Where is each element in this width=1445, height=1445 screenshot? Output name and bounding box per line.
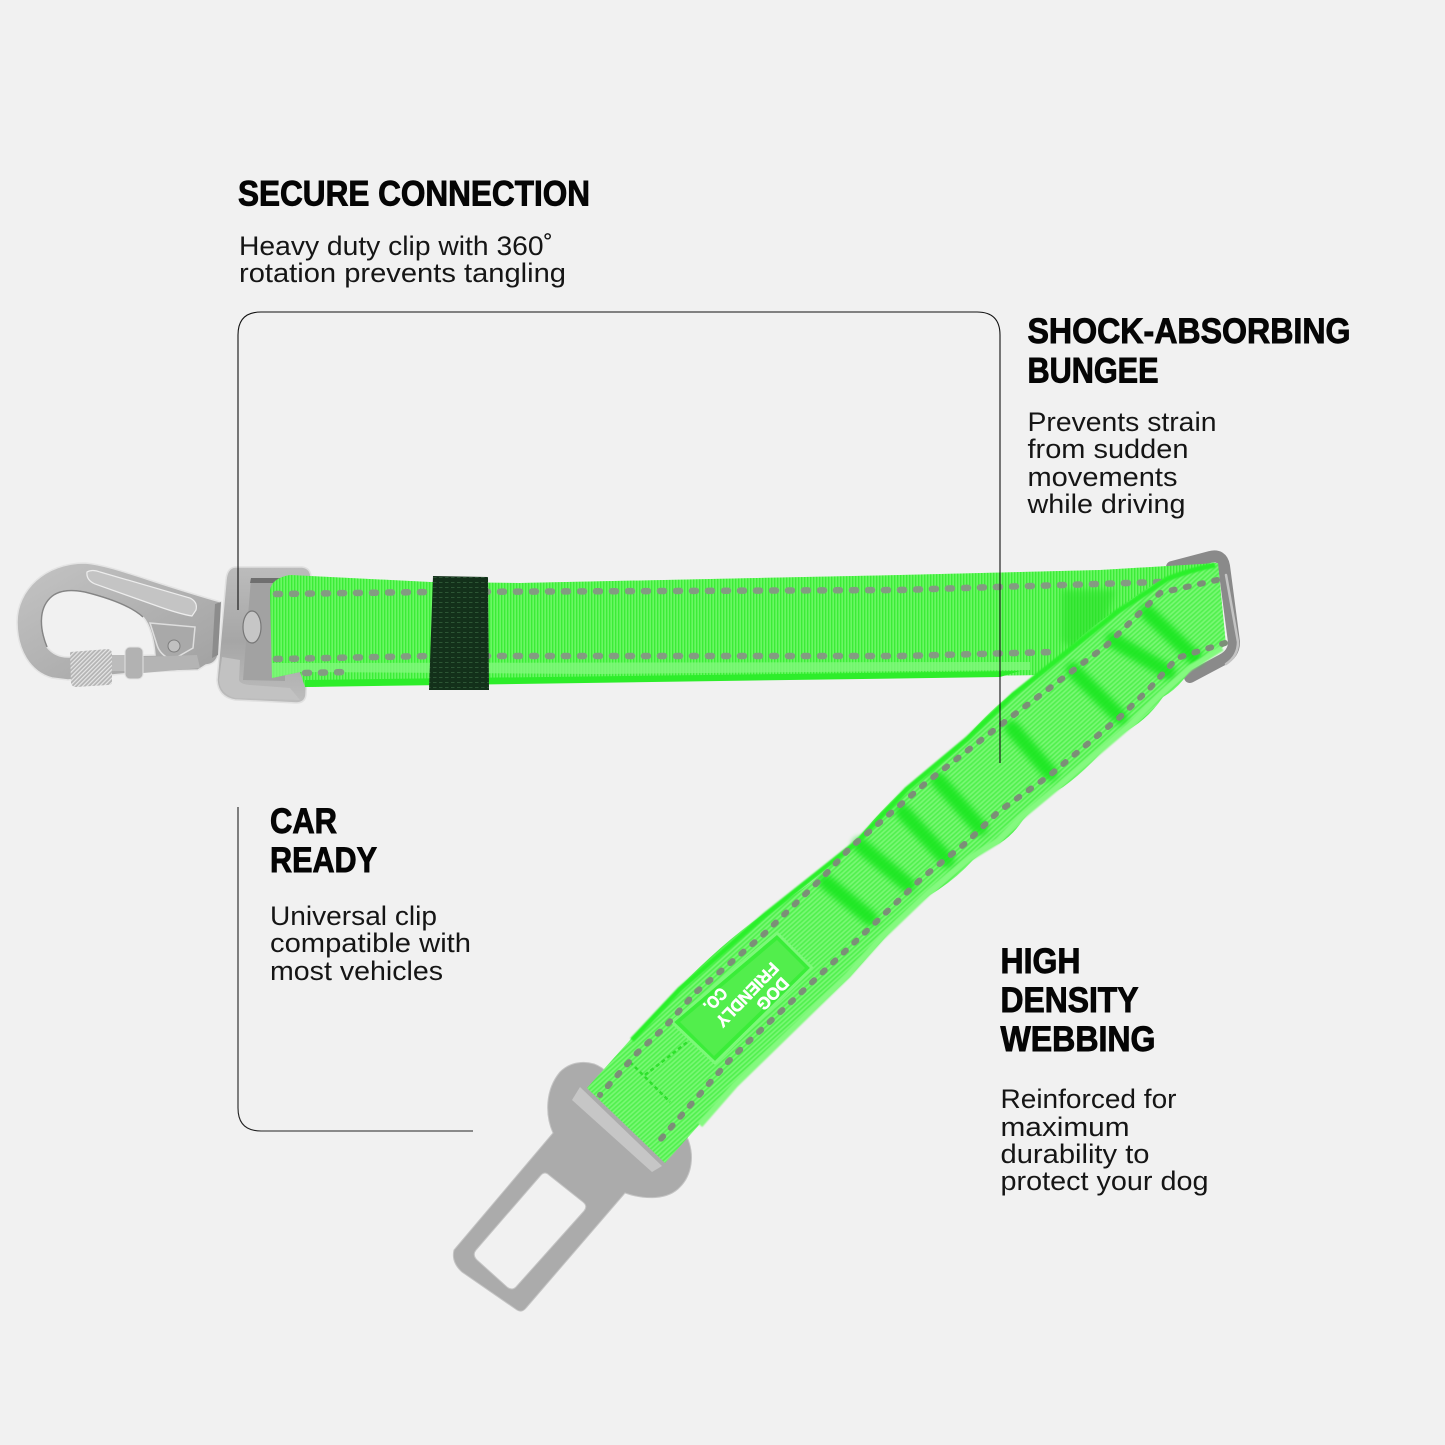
heading: high density webbing: WEBBING	[1000, 1020, 1156, 1059]
heading: high density webbing: HIGH	[1000, 942, 1080, 981]
text block: shock-absorbing bungee	[1026, 312, 1350, 519]
description: car ready: most vehicles	[270, 956, 443, 986]
description: secure connection: rotation prevents tangling	[239, 258, 566, 288]
description: secure connection: Heavy duty clip with 360˚	[239, 231, 553, 261]
description: webbing: Reinforced for	[1000, 1084, 1176, 1114]
description: webbing	[1000, 1084, 1208, 1196]
bungee soft edges	[632, 565, 1215, 1040]
logo text: FRIENDLY	[711, 958, 782, 1031]
heading: high density webbing	[1000, 942, 1156, 1059]
description: bungee: from sudden	[1028, 434, 1188, 464]
description: car ready	[270, 901, 471, 986]
bungee folds	[826, 612, 1195, 918]
logo patch	[672, 933, 812, 1063]
text block: secure connection	[238, 174, 590, 288]
description: webbing: maximum	[1000, 1112, 1130, 1142]
heading: car ready: CAR	[270, 802, 337, 841]
snap hook	[17, 563, 221, 687]
description: bungee: while driving	[1026, 489, 1186, 519]
heading: car ready	[270, 802, 377, 880]
logo text: CO.	[699, 983, 731, 1015]
logo text: DOG	[753, 973, 793, 1014]
description: bungee: movements	[1028, 462, 1178, 492]
heading: high density webbing: DENSITY	[1000, 981, 1138, 1020]
callout line: car ready	[238, 807, 473, 1131]
product: car restraint strap	[17, 556, 1238, 1311]
heading: shock-absorbing bungee: SHOCK-ABSORBING	[1028, 312, 1350, 351]
bungee stitching	[600, 580, 1225, 1140]
heading: shock-absorbing bungee: BUNGEE	[1028, 352, 1158, 390]
heading: car ready: READY	[270, 841, 377, 880]
callout line: secure connection and bungee	[238, 312, 1000, 763]
description: bungee: Prevents strain	[1028, 407, 1216, 437]
lower strap box stitch	[630, 1040, 690, 1102]
description: car ready: Universal clip	[270, 901, 437, 931]
swivel loop	[217, 567, 311, 703]
text block: high density webbing	[1000, 942, 1208, 1196]
reflective stitching	[276, 582, 1160, 673]
heading: shock-absorbing bungee	[1028, 312, 1350, 390]
description: webbing: durability to	[1000, 1139, 1150, 1169]
description: secure connection	[239, 231, 566, 288]
description: webbing: protect your dog	[1000, 1166, 1208, 1196]
text block: car ready	[270, 802, 471, 986]
elastic keeper loop	[429, 576, 489, 690]
description: bungee	[1026, 407, 1216, 519]
description: car ready: compatible with	[270, 928, 471, 958]
metal seatbelt buckle	[453, 1062, 691, 1311]
main webbing strap	[270, 563, 1218, 687]
rear metal ring	[1172, 556, 1238, 677]
heading: secure connection: SECURE CONNECTION	[238, 174, 590, 214]
shock-absorbing bungee section	[587, 563, 1226, 1163]
